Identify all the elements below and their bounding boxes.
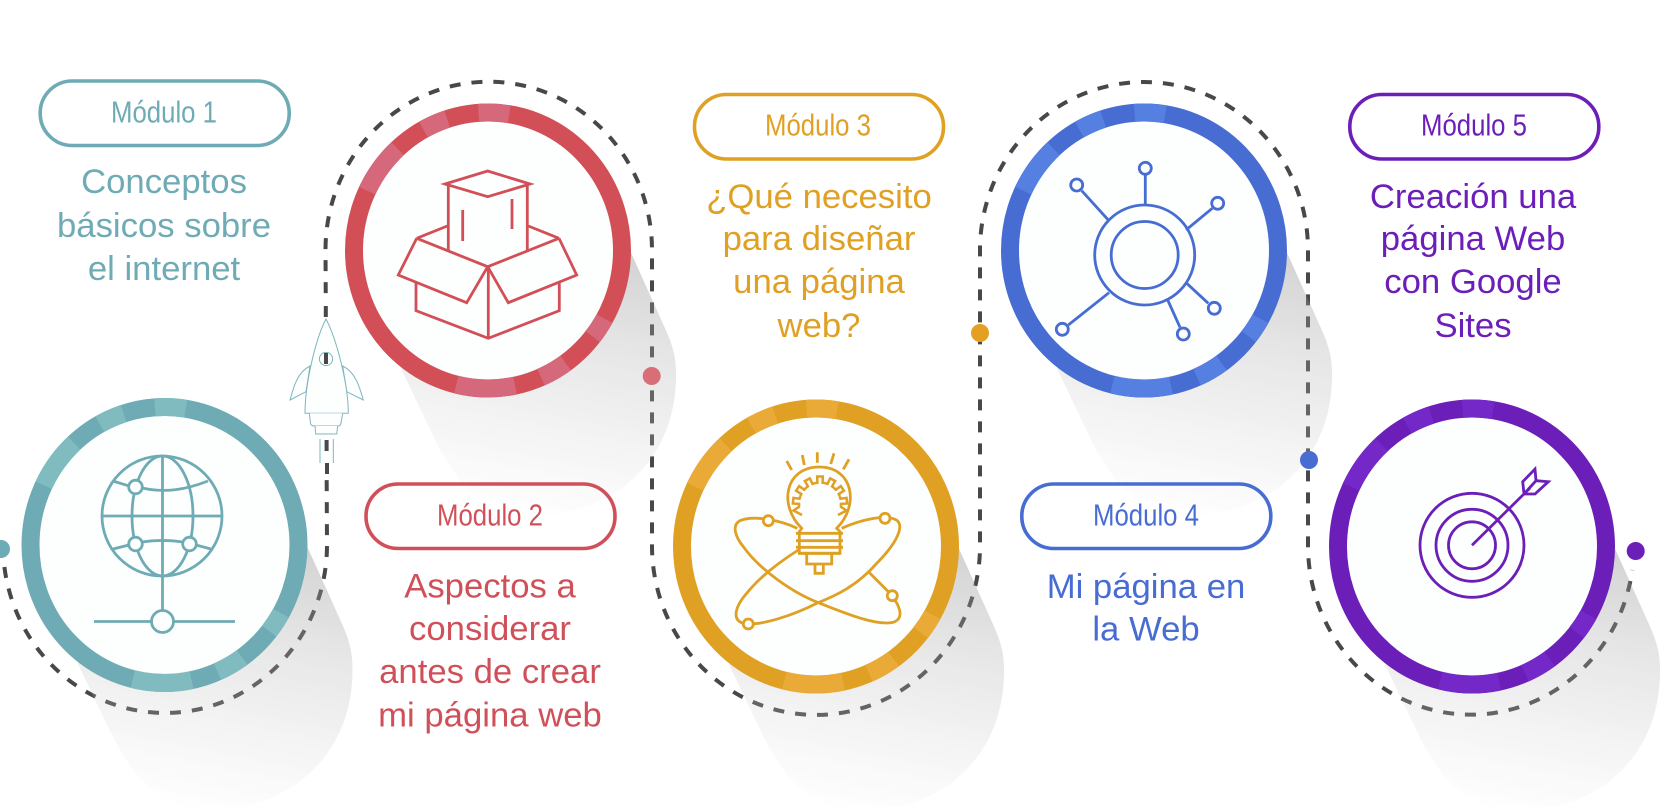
label: módulo 1: Módulo 1 xyxy=(111,95,217,130)
label: módulo 3: Módulo 3 xyxy=(765,108,871,143)
label: módulo 3 xyxy=(694,94,944,159)
panel: módulo 5 xyxy=(1338,408,1606,684)
icon: target with arrow xyxy=(1420,469,1548,597)
panel: módulo 2 xyxy=(354,112,622,388)
icon: rocket xyxy=(290,298,363,480)
ring: módulo 4 xyxy=(1010,112,1278,388)
panel: módulo 1 xyxy=(30,407,298,683)
text: módulo 5 xyxy=(1370,178,1577,345)
label: módulo 2: Módulo 2 xyxy=(437,498,543,533)
drop shadows xyxy=(78,250,1660,806)
label: módulo 5: Módulo 5 xyxy=(1421,108,1527,143)
text: módulo 2 xyxy=(378,568,602,735)
shadow tint over route line xyxy=(78,250,1660,806)
icon: globe network xyxy=(94,456,235,632)
text: módulo 5: con Google xyxy=(1384,263,1562,301)
text: módulo 4: la Web xyxy=(1092,611,1200,649)
text: módulo 3: web? xyxy=(777,307,860,345)
text: módulo 3 xyxy=(706,178,932,345)
text: módulo 4: Mi página en xyxy=(1047,568,1245,606)
text: módulo 3: una página xyxy=(733,263,906,301)
panel: módulo 4 xyxy=(1010,112,1278,388)
text: módulo 2: antes de crear xyxy=(379,653,601,691)
label: módulo 4: Módulo 4 xyxy=(1093,498,1199,533)
label: módulo 4 xyxy=(1022,484,1271,548)
text: módulo 3: para diseñar xyxy=(723,220,915,258)
ring: módulo 2 xyxy=(354,112,622,388)
label: módulo 2 xyxy=(366,484,615,548)
text: módulo 5: Sites xyxy=(1434,307,1512,345)
text: módulo 3: ¿Qué necesito xyxy=(706,178,932,216)
text: módulo 1: Conceptos xyxy=(81,163,247,201)
ring: módulo 1 xyxy=(30,407,298,683)
panel: módulo 3 xyxy=(682,408,950,684)
icon: open box xyxy=(398,171,577,338)
ring: módulo 5 xyxy=(1338,408,1606,684)
text: módulo 2: Aspectos a xyxy=(404,568,577,606)
text: módulo 4 xyxy=(1047,568,1245,649)
text: módulo 2: considerar xyxy=(409,610,571,648)
text: módulo 1: el internet xyxy=(88,250,241,288)
icon: lightbulb with orbits xyxy=(735,452,900,629)
route dots xyxy=(0,324,1645,560)
text: módulo 1: básicos sobre xyxy=(57,207,271,245)
text: módulo 1 xyxy=(57,163,271,288)
dashed route line xyxy=(4,82,1632,715)
text: módulo 5: página Web xyxy=(1381,220,1565,258)
text: módulo 2: mi página web xyxy=(378,697,602,735)
text: módulo 5: Creación una xyxy=(1370,178,1577,216)
icon: network hub xyxy=(1056,162,1224,340)
label: módulo 5 xyxy=(1350,94,1599,159)
label: módulo 1 xyxy=(40,81,289,146)
ring: módulo 3 xyxy=(682,408,950,684)
